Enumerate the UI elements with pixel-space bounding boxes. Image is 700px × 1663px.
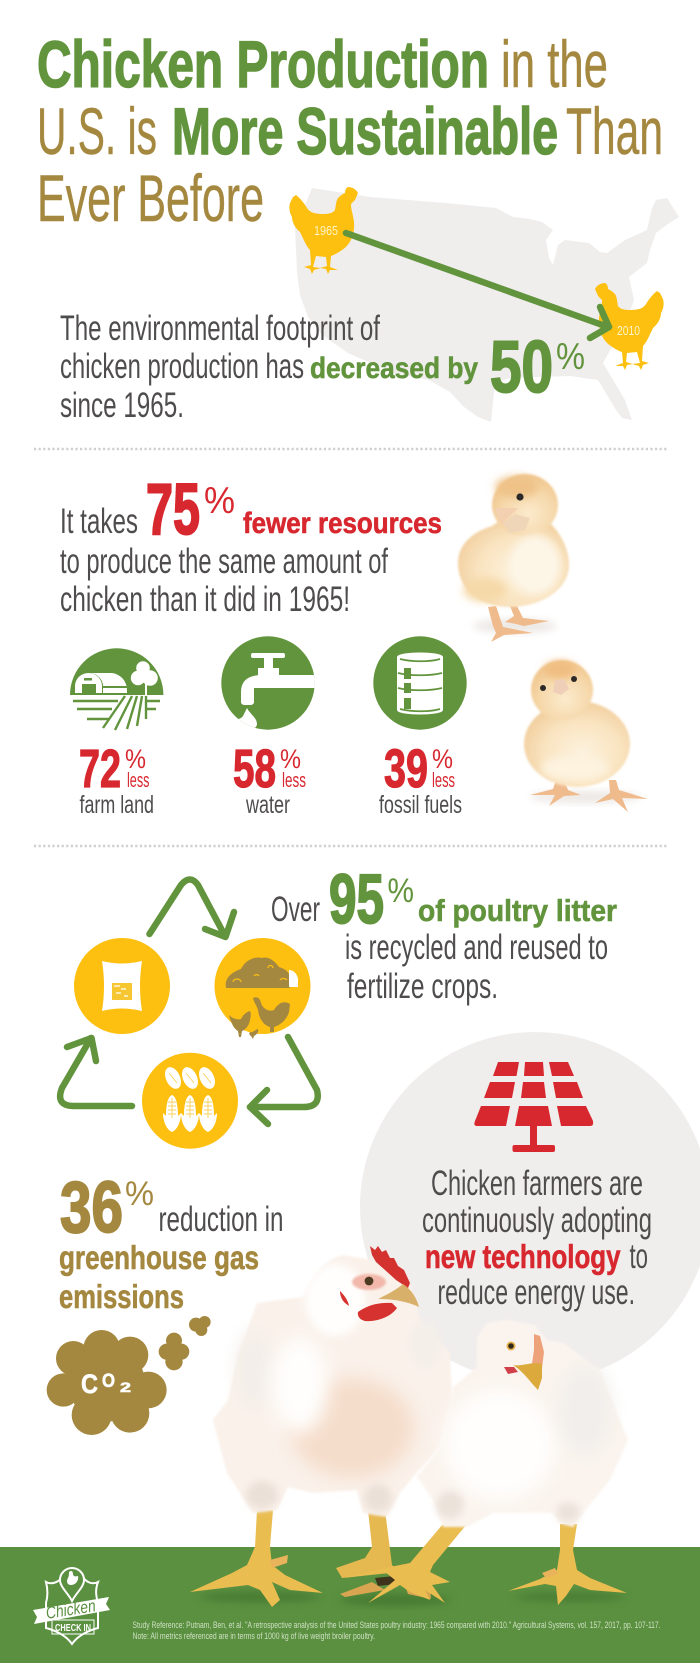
title: Chicken Production — [37, 27, 489, 101]
text block: environmental footprint — [60, 309, 585, 425]
recycling loop diagram — [60, 880, 318, 1149]
stat: 58% less water — [233, 739, 306, 819]
photo: chick looking left — [458, 474, 569, 642]
hen legs and feet — [190, 1510, 627, 1607]
stat: 72% less farm land — [79, 739, 154, 819]
chicken icon: 2010: 2010 — [617, 323, 640, 338]
hen: right — [417, 1320, 628, 1527]
map of the United States — [295, 188, 679, 422]
text block: 36% reduction in greenhouse gas emissions — [59, 1168, 284, 1315]
title: Ever Before — [37, 161, 264, 235]
foot: left hen, left leg — [190, 1510, 323, 1607]
text block: 75% fewer resources: fewer resources — [243, 507, 442, 540]
hen — [229, 1011, 251, 1037]
text block: 95% of poultry litter: 95 — [329, 860, 384, 938]
text block: 36% reduction in greenhouse gas emissions: greenhouse gas — [59, 1239, 259, 1276]
title: U.S. is — [37, 94, 157, 168]
text block: new technology: to — [630, 1237, 648, 1276]
text block: 75% fewer resources: to produce the same amount of — [60, 542, 388, 581]
foot: left hen, right leg — [336, 1510, 400, 1578]
stat: 39% less fossil fuels: less — [432, 770, 455, 792]
chick — [249, 1029, 258, 1039]
text block: 36% reduction in greenhouse gas emissions: % — [125, 1175, 154, 1213]
text block: environmental footprint: % — [556, 336, 585, 377]
text block: 95% of poultry litter: Over — [271, 890, 320, 929]
green footer band — [0, 1547, 700, 1663]
study reference footnote — [132, 1620, 660, 1641]
text block: 75% fewer resources: % — [204, 480, 235, 521]
stat: 39% less fossil fuels — [379, 739, 462, 819]
text block: new technology: new technology — [425, 1238, 621, 1275]
icon: water faucet — [221, 636, 320, 732]
title: in the — [501, 27, 608, 101]
arrow: bag to litter — [150, 880, 234, 937]
rooster — [253, 997, 290, 1032]
icon: CO2 cloud — [47, 1316, 211, 1435]
text block: 36% reduction in greenhouse gas emissions: reduction in — [158, 1200, 284, 1239]
text block: 95% of poultry litter: % — [388, 872, 414, 910]
text block: 75% fewer resources — [60, 470, 442, 619]
chicken icon: 2010 — [595, 283, 664, 370]
photo: two white hens — [190, 1246, 628, 1607]
hen shadows on the ground — [200, 1592, 625, 1606]
text block: 36% reduction in greenhouse gas emissions: emissions — [59, 1278, 184, 1315]
icon: farm land — [70, 648, 163, 730]
icon: poultry litter and chickens — [214, 938, 310, 1039]
text block: 95% of poultry litter: fertilize crops. — [347, 967, 498, 1006]
text block: 95% of poultry litter — [271, 860, 617, 1006]
text block: environmental footprint: chicken production has — [60, 347, 304, 386]
icon: CO2 cloud: O — [102, 1371, 115, 1392]
stat: 39% less fossil fuels: % — [432, 744, 453, 774]
stat: 72% less farm land: % — [125, 744, 146, 774]
arrow: crops to bag — [60, 1038, 132, 1106]
text block: 36% reduction in greenhouse gas emissions: 36 — [60, 1168, 123, 1248]
chicken icon: 1965: 1965 — [314, 223, 338, 238]
photo: chick facing forward — [524, 660, 648, 812]
stat: 58% less water: 58 — [233, 739, 276, 799]
stat: 72% less farm land: less — [127, 770, 150, 792]
text block: environmental footprint: The environmental footprint of — [60, 309, 380, 348]
icon: solar panel — [474, 1062, 593, 1152]
title — [37, 27, 663, 235]
stat: 39% less fossil fuels: 39 — [384, 739, 428, 799]
text block: 75% fewer resources: It takes — [60, 502, 138, 541]
stat: 58% less water: less — [282, 770, 306, 792]
stat: 39% less fossil fuels: fossil fuels — [379, 791, 462, 819]
panel: new technology circle — [360, 1032, 700, 1382]
text block: environmental footprint: decreased by — [310, 352, 478, 385]
text block: environmental footprint: since 1965. — [60, 386, 184, 425]
study reference footnote: Note: All metrics referenced are in terms of 1000 kg of live weight broiler poultry. — [132, 1631, 375, 1641]
icon: fossil fuel barrel — [373, 636, 467, 730]
stat: 72% less farm land: 72 — [79, 739, 121, 799]
text block: new technology — [422, 1164, 652, 1312]
icon: CO2 cloud: 2 — [120, 1379, 131, 1395]
logo: Chicken Check In — [33, 1568, 110, 1644]
foot: right hen, right leg — [508, 1524, 627, 1605]
logo: Chicken Check In: CHECK IN — [55, 1623, 91, 1634]
text block: environmental footprint: 50 — [490, 327, 553, 408]
icon: corn crops — [142, 1053, 238, 1149]
text block: 75% fewer resources: chicken than it did in 1965! — [60, 580, 350, 619]
arrow: litter to crops — [250, 1037, 318, 1124]
text block: 75% fewer resources: 75 — [146, 470, 200, 550]
stat: 58% less water: % — [280, 744, 301, 774]
chicken icon: 1965 — [289, 187, 358, 274]
icon: CO2 cloud: C — [81, 1369, 98, 1399]
logo: Chicken Check In: Chicken — [45, 1596, 97, 1623]
arrow from 1965 to 2010 — [346, 233, 609, 338]
icon: feed bag — [74, 938, 170, 1034]
foot: right hen, left leg — [345, 1524, 467, 1603]
hen: left — [213, 1246, 452, 1517]
stat: 72% less farm land: farm land — [80, 791, 154, 819]
text block: 95% of poultry litter: of poultry litter — [418, 893, 617, 928]
stat: 58% less water: water — [245, 791, 290, 819]
